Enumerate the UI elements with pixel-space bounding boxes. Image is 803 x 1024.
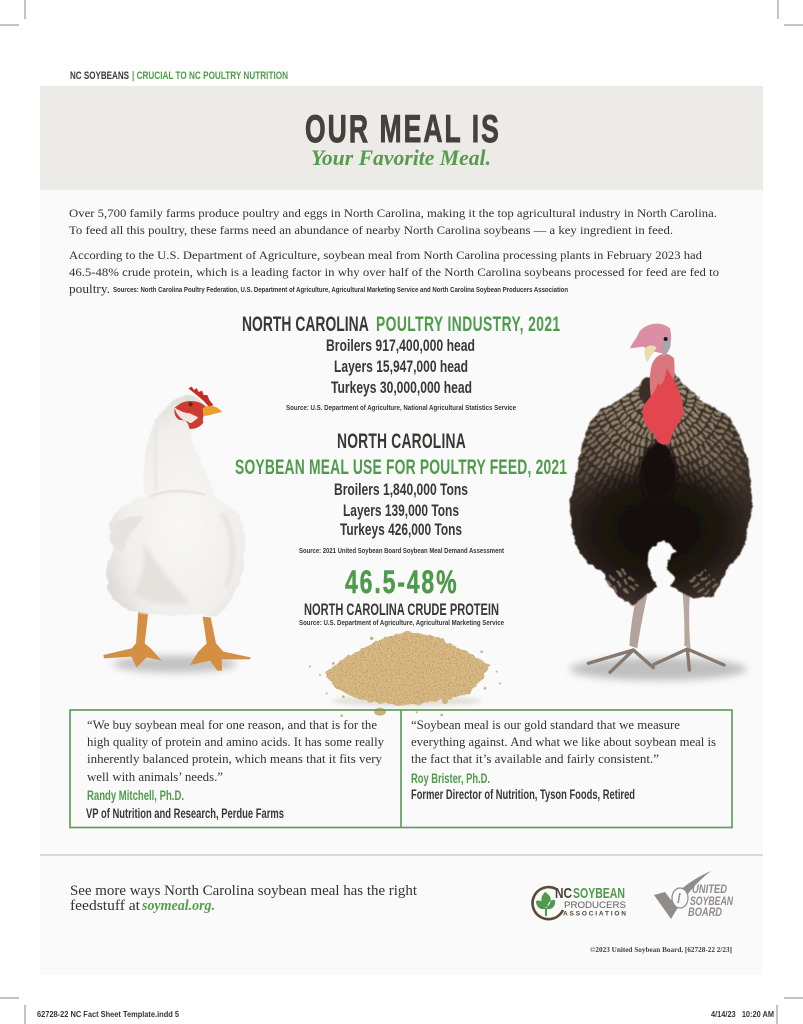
quote: Randy Mitchell	[86, 718, 385, 821]
crude protein stat	[299, 564, 504, 627]
soybean meal use stats: Turkeys 426,000 Tons	[340, 521, 462, 539]
logo: United Soybean Board: SOYBEAN	[690, 894, 733, 908]
footer divider	[40, 854, 763, 856]
footer call to action: feedstuff at	[70, 898, 141, 914]
soybean meal use stats: Broilers 1,840,000 Tons	[334, 481, 468, 499]
logo: NC Soybean Producers Association: PRODUCERS	[564, 900, 626, 911]
logo: NC Soybean Producers Association	[533, 885, 626, 919]
quote: Roy Brister	[411, 718, 716, 802]
poultry industry stats: Source: U.S. Department of Agriculture, National Agricultural Statistics Service	[286, 403, 516, 412]
intro text	[69, 206, 719, 296]
poultry industry stats: Broilers 917,400,000 head	[326, 337, 475, 355]
illustration: soybean meal pile	[309, 632, 501, 717]
soybean meal use stats	[235, 429, 567, 555]
intro text: According to the U.S. Department of Agriculture, soybean meal from North Carolina processing plants in February 2023 had	[69, 248, 702, 262]
quote: Roy Brister: the fact that it’s available and fairly consistent.”	[411, 752, 659, 766]
crude protein stat: 46.5-48%	[345, 564, 457, 600]
intro text: 46.5-48% crude protein, which is a leading factor in why over half of the North Carolina soybeans processed for feed are fed to	[69, 265, 719, 279]
intro text: To feed all this poultry, these farms need an abundance of nearby North Carolina soybeans — a key ingredient in feed.	[69, 223, 673, 237]
soybean meal use stats: NORTH CAROLINA	[337, 429, 466, 453]
subtitle: Your Favorite Meal.	[311, 145, 491, 170]
poultry industry stats: Turkeys 30,000,000 head	[331, 379, 472, 397]
running header: | CRUCIAL TO NC POULTRY NUTRITION	[132, 70, 288, 82]
logo: NC Soybean Producers Association: NC	[555, 885, 572, 902]
quote: Randy Mitchell: VP of Nutrition and Research, Perdue Farms	[86, 806, 284, 821]
title banner	[40, 86, 763, 190]
quote: Roy Brister: Former Director of Nutrition, Tyson Foods, Retired	[411, 787, 635, 802]
quote: Roy Brister: “Soybean meal is our gold standard that we measure	[411, 718, 680, 732]
copyright line: ©2023 United Soybean Board. [62728-22 2/23]	[590, 945, 732, 954]
illustration: turkey	[568, 324, 754, 684]
running header	[70, 70, 288, 82]
intro text: Over 5,700 family farms produce poultry and eggs in North Carolina, making it the top agricultural industry in North Carolina.	[69, 206, 717, 220]
footer call to action: soymeal.org.	[141, 898, 215, 914]
quote: Roy Brister: Roy Brister, Ph.D.	[411, 771, 490, 786]
intro text: Sources: North Carolina Poultry Federation, U.S. Department of Agriculture, Agricultural Marketing Service and North Carolina Soybean Producers Association	[113, 285, 568, 294]
intro text: poultry.	[69, 281, 110, 296]
illustration: white chicken	[103, 387, 251, 673]
quote box	[70, 710, 732, 828]
poultry industry stats: Layers 15,947,000 head	[334, 358, 468, 376]
quote: Randy Mitchell: inherently balanced protein, which means that it fits very	[87, 752, 383, 766]
soybean meal use stats: SOYBEAN MEAL USE FOR POULTRY FEED, 2021	[235, 455, 567, 479]
page background panel	[40, 190, 763, 975]
soybean meal use stats: Layers 139,000 Tons	[343, 502, 459, 520]
poultry industry stats: NORTH CAROLINA	[242, 312, 369, 336]
quote: Randy Mitchell: “We buy soybean meal for one reason, and that is for the	[87, 718, 377, 732]
logo: United Soybean Board: UNITED	[692, 882, 727, 896]
quote: Randy Mitchell: Randy Mitchell, Ph.D.	[87, 788, 184, 803]
logo: United Soybean Board	[654, 871, 733, 919]
footer call to action	[70, 883, 418, 914]
poultry industry stats: POULTRY INDUSTRY, 2021	[376, 312, 560, 336]
crude protein stat: Source: U.S. Department of Agriculture, Agricultural Marketing Service	[299, 618, 504, 627]
crude protein stat: NORTH CAROLINA CRUDE PROTEIN	[304, 601, 499, 619]
logo: United Soybean Board: BOARD	[688, 905, 722, 919]
quote: Roy Brister: everything against. And what we like about soybean meal is	[411, 735, 716, 749]
print slug left: 62728-22 NC Fact Sheet Template.indd 5	[37, 1010, 180, 1019]
soybean meal use stats: Source: 2021 United Soybean Board Soybean Meal Demand Assessment	[299, 546, 504, 555]
logo: NC Soybean Producers Association: ASSOCIATION	[563, 910, 626, 918]
print slug right: 4/14/23 10:20 AM	[711, 1010, 774, 1019]
poultry industry stats	[242, 312, 560, 412]
title: OUR MEAL IS	[305, 108, 499, 151]
quote: Randy Mitchell: well with animals’ needs.”	[87, 770, 223, 784]
logo: NC Soybean Producers Association: SOYBEAN	[573, 885, 625, 902]
quote: Randy Mitchell: high quality of protein and amino acids. It has some really	[87, 735, 385, 749]
footer call to action: See more ways North Carolina soybean meal has the right	[70, 883, 418, 899]
running header: NC SOYBEANS	[70, 70, 129, 82]
